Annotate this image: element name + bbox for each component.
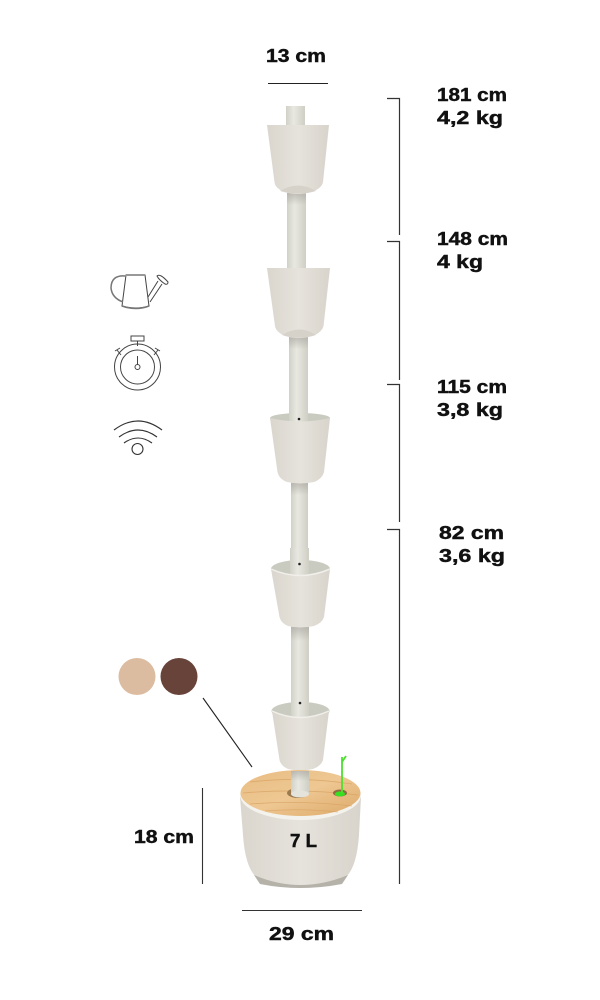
- pot 2: [267, 268, 330, 338]
- pipe segments: [286, 106, 309, 705]
- dimension: base height: [134, 788, 202, 884]
- bracket: 181 cm: 4,2 kg: [437, 108, 503, 128]
- icon: wifi: [114, 421, 162, 454]
- pot 5: [272, 690, 330, 770]
- bracket: 115 cm: [387, 377, 507, 522]
- bracket: 115 cm: 3,8 kg: [437, 400, 503, 420]
- swatch leader line: [203, 698, 252, 767]
- bracket: 82 cm: [387, 523, 505, 884]
- dimension: width top: 13 cm: [266, 46, 326, 66]
- dimension: base height: 18 cm: [134, 827, 194, 847]
- bracket: 148 cm: [387, 229, 508, 380]
- bracket: 148 cm: 4 kg: [437, 252, 483, 272]
- dimension: width top: [266, 46, 328, 84]
- bracket: 148 cm: 148 cm: [437, 229, 508, 249]
- bracket: 181 cm: [387, 85, 507, 235]
- color swatch: brown: [160, 658, 198, 695]
- base reservoir: [240, 797, 361, 888]
- tower planter: [240, 106, 361, 888]
- bracket: 115 cm: 115 cm: [437, 377, 507, 397]
- pot 3: [270, 400, 330, 484]
- volume label: 7 L: [290, 831, 317, 851]
- bracket: 82 cm: 3,6 kg: [439, 546, 505, 566]
- icon: stopwatch: [114, 336, 160, 390]
- pot 4: [271, 548, 330, 628]
- color swatch: beige: [118, 658, 156, 695]
- icon: watering can: [111, 275, 168, 308]
- pot 1: [267, 125, 329, 194]
- pipe shadows under pots: [287, 193, 309, 641]
- bracket: 181 cm: 181 cm: [437, 85, 507, 105]
- dimension: base width: [242, 910, 362, 944]
- water level indicator: [335, 756, 346, 796]
- bracket: 82 cm: 82 cm: [439, 523, 504, 543]
- wood lid: [240, 770, 361, 820]
- dimension: base width: 29 cm: [269, 924, 334, 944]
